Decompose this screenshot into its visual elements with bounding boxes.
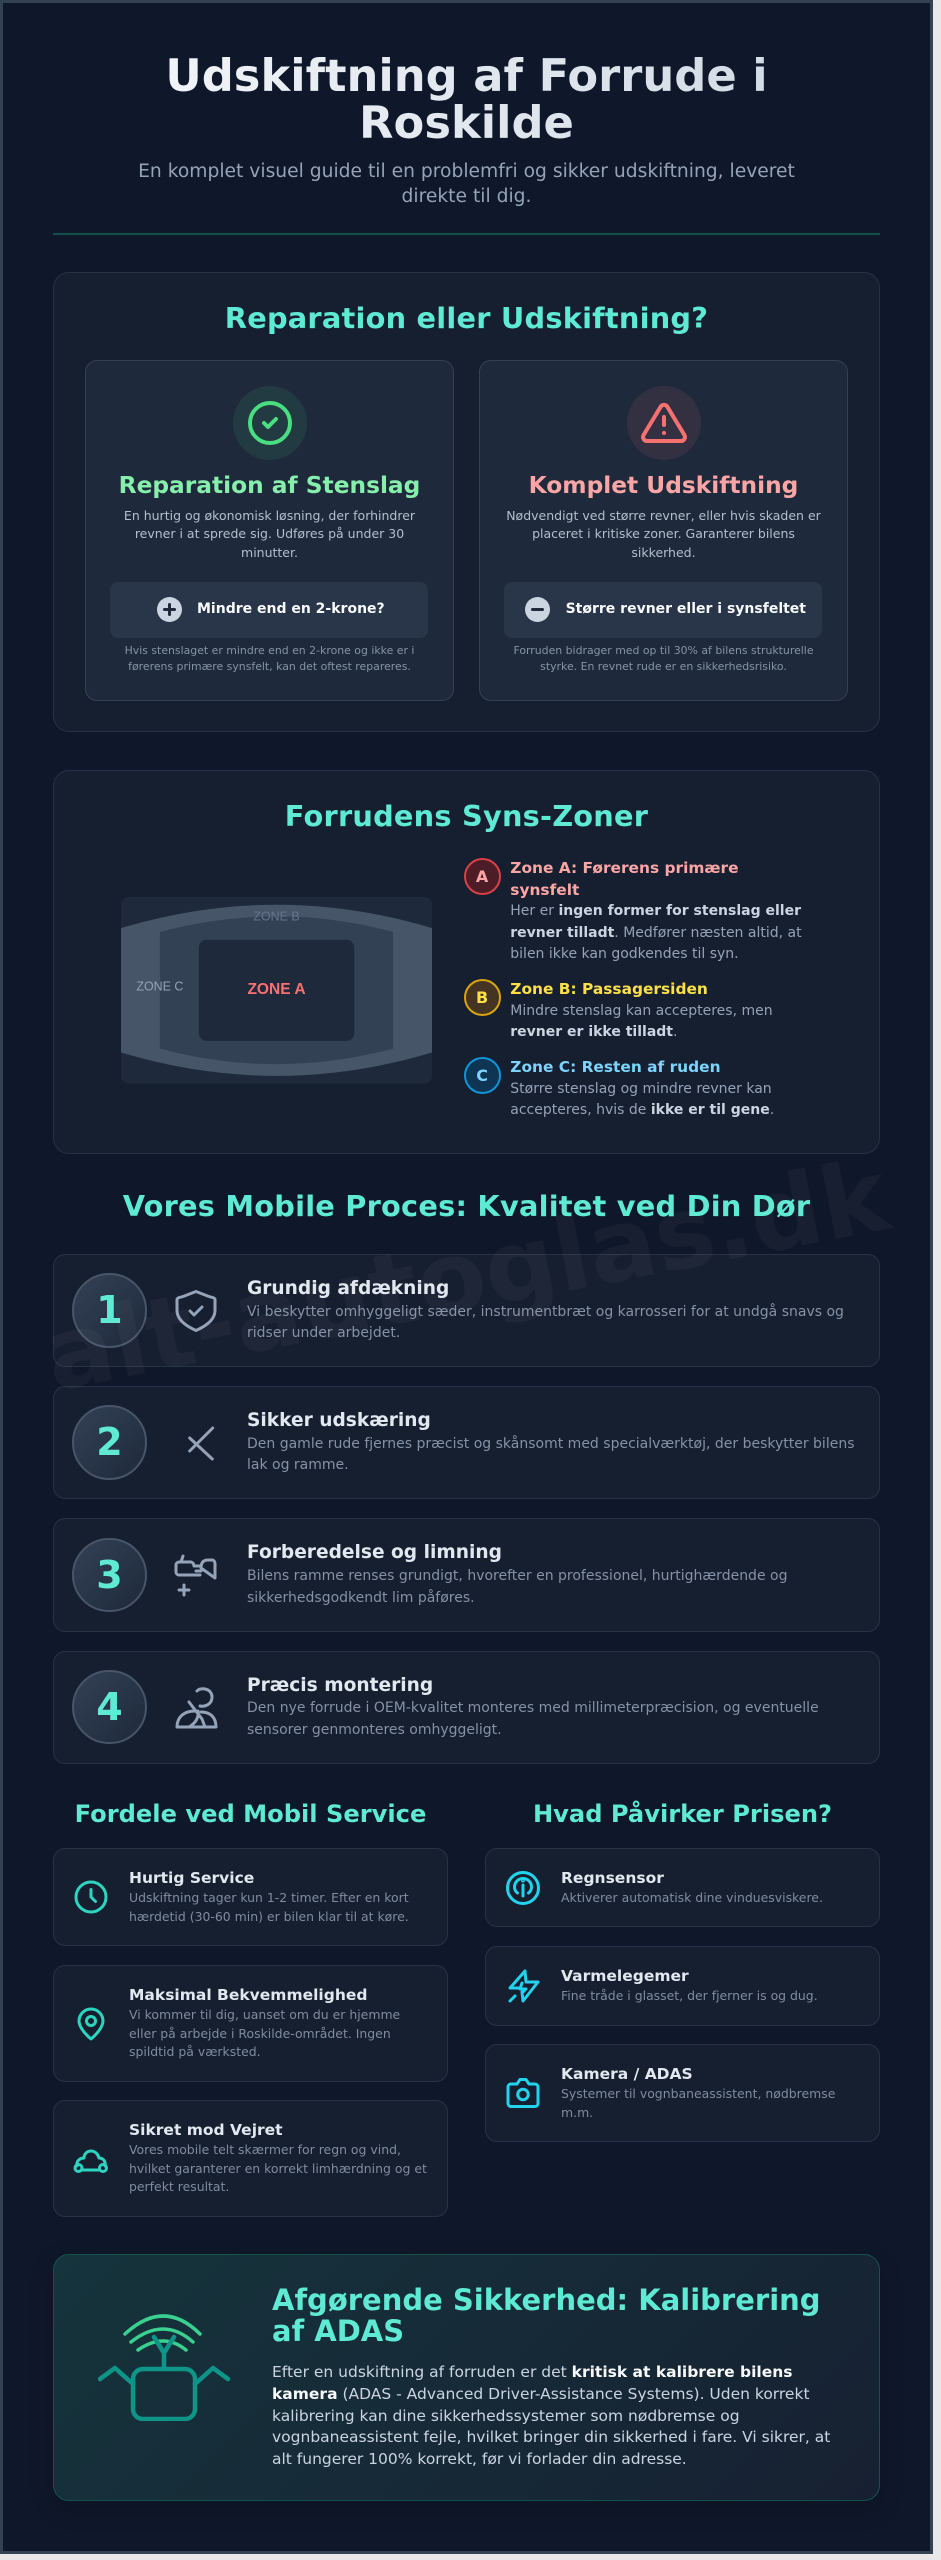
title: Udskiftning af Forrude i: [165, 49, 768, 102]
card text: chip repair: En hurtig og økonomisk løsning, der forhindrer: [124, 508, 415, 523]
step 4 text: Den nye forrude i OEM-kvalitet monteres med millimeterpræcision, og eventuelle: [247, 1700, 819, 1716]
number 4: [72, 1670, 147, 1744]
icon: ADAS camera and signal: [98, 2314, 230, 2421]
step 1 title: Grundig afdækning: [247, 1278, 449, 1299]
benefit text: eller på arbejde i Roskilde-området. Ingen: [129, 2026, 391, 2040]
benefit text: Vores mobile telt skærmer for regn og vind,: [129, 2142, 401, 2157]
heading: zones: Forrudens Syns-Zoner: [285, 799, 648, 833]
card footnote: full replacement: styrke. En revnet rude er en sikkerhedsrisiko.: [540, 660, 787, 673]
panel: windshield zones: [53, 770, 880, 1154]
legend: zones: [464, 858, 802, 1118]
icon: sensor: [506, 1871, 540, 1905]
zone B title: Zone B: Passagersiden: [510, 980, 708, 998]
step 1: [53, 1254, 880, 1367]
card heading: chip repair: Reparation af Stenslag: [119, 472, 420, 499]
heading: price factors: Hvad Påvirker Prisen?: [533, 1800, 832, 1828]
zone A title: Zone A: Førerens primære: [510, 859, 739, 877]
icon: minus: [525, 597, 550, 622]
rule box: larger cracks: [504, 582, 822, 638]
watermark: alt-autoglas.dk: [36, 1136, 897, 1415]
step 2 text: Den gamle rude fjernes præcist og skånsomt med specialværktøj, der beskytter bilens: [247, 1436, 854, 1452]
badge A: [464, 858, 501, 895]
subtitle: direkte til dig.: [402, 186, 531, 207]
factor title: Varmelegemer: [561, 1967, 689, 1985]
callout text: kamera (ADAS - Advanced Driver-Assistance Systems). Uden korrekt: [272, 2385, 810, 2403]
heading: mobile benefits: Fordele ved Mobil Service: [75, 1800, 426, 1828]
factor text: Systemer til vognbaneassistent, nødbremse: [561, 2086, 835, 2101]
title: Roskilde: [359, 96, 574, 149]
subtitle: [138, 161, 795, 207]
icon: lightning bolt: [508, 1969, 540, 2003]
icon: clock: [74, 1880, 108, 1914]
benefit: fast service: [53, 1848, 448, 1946]
step 2 text: lak og ramme.: [247, 1457, 349, 1473]
benefit text: [129, 2007, 400, 2059]
step 3: [53, 1518, 880, 1632]
factor title: Regnsensor: [561, 1869, 664, 1887]
card text: full replacement: sikkerhed.: [631, 545, 696, 560]
callout heading: Afgørende Sikkerhed: Kalibrering: [272, 2282, 821, 2316]
benefit text: perfekt resultat.: [129, 2179, 229, 2194]
icon: check circle: [232, 386, 306, 460]
zone A title: synsfelt: [510, 881, 579, 899]
rule text: Mindre end en 2-krone?: [197, 601, 385, 617]
card text: chip repair: [124, 508, 415, 560]
benefit text: Vi kommer til dig, uanset om du er hjemme: [129, 2007, 400, 2022]
icon: cleaning and glue: [174, 1554, 216, 1596]
badge C: [464, 1057, 501, 1094]
zone A text: bilen ikke kan godkendes til syn.: [510, 946, 739, 962]
callout text: [272, 2363, 830, 2468]
zone B text: [510, 1002, 773, 1040]
factor text: [561, 2086, 835, 2120]
callout text: Efter en udskiftning af forruden er det kritisk at kalibrere bilens: [272, 2363, 793, 2381]
zone B text: Mindre stenslag kan accepteres, men: [510, 1002, 773, 1018]
heading: repair or replace: Reparation eller Udskiftning?: [225, 301, 708, 335]
zone C text: [510, 1080, 774, 1118]
step 2 text: [247, 1435, 854, 1473]
card heading: full replacement: Komplet Udskiftning: [529, 472, 798, 499]
benefit text: [129, 1890, 409, 1924]
badge B: [464, 979, 501, 1016]
factor title: Kamera / ADAS: [561, 2065, 693, 2083]
benefit text: hærdetid (30-60 min) er bilen klar til at køre.: [129, 1908, 409, 1924]
step 1 text: ridser under arbejdet.: [247, 1325, 400, 1341]
factor text: m.m.: [561, 2104, 593, 2120]
step 4: [53, 1651, 880, 1764]
step 3 text: [247, 1568, 787, 1606]
zone B text: revner er ikke tilladt.: [510, 1024, 677, 1040]
benefit text: spildtid på værksted.: [129, 2044, 261, 2059]
zone A text: Her er ingen former for stenslag eller: [510, 903, 801, 919]
card: chip repair: [85, 360, 454, 701]
rule box: smaller than coin: [110, 582, 428, 638]
zone A text: revner tilladt. Medfører næsten altid, at: [510, 925, 802, 941]
callout heading: af ADAS: [272, 2314, 404, 2348]
price factor: rain sensor: [485, 1848, 880, 1927]
panel: repair or replace: [53, 272, 880, 732]
step 4 text: sensorer genmonteres omhyggeligt.: [247, 1722, 502, 1738]
card: full replacement: [479, 360, 848, 701]
step 2 title: Sikker udskæring: [247, 1410, 431, 1431]
card footnote: chip repair: [125, 644, 414, 673]
price factor: heating: [485, 1946, 880, 2026]
benefit: weather protection: [53, 2100, 448, 2217]
icon: location pin: [78, 2008, 104, 2040]
callout: ADAS calibration: [53, 2254, 880, 2501]
card text: chip repair: revner i at sprede sig. Udføres på under 30: [135, 526, 404, 541]
benefit: convenience: [53, 1965, 448, 2082]
benefit title: Hurtig Service: [129, 1869, 254, 1887]
diagram: windshield zones: ZONE A: [247, 981, 306, 998]
zone C text: Større stenslag og mindre revner kan: [510, 1080, 772, 1096]
callout text: alt fungerer 100% korrekt, før vi forlader din adresse.: [272, 2450, 687, 2468]
benefit text: [129, 2142, 427, 2194]
subtitle: En komplet visuel guide til en problemfri og sikker udskiftning, leveret: [138, 161, 795, 182]
card text: full replacement: [506, 508, 821, 560]
step 3 text: Bilens ramme renses grundigt, hvorefter en professionel, hurtighærdende og: [247, 1568, 787, 1584]
rule text: Større revner eller i synsfeltet: [566, 601, 806, 617]
diagram: windshield zones: [121, 897, 432, 1084]
number 2: 2: [96, 1420, 123, 1464]
zone A text: [510, 903, 802, 962]
heading: process: Vores Mobile Proces: Kvalitet ved Din Dør: [123, 1189, 810, 1223]
icon: cutting tool: [188, 1426, 214, 1461]
card text: full replacement: Nødvendigt ved større revner, eller hvis skaden er: [506, 508, 821, 523]
benefit text: Udskiftning tager kun 1-2 timer. Efter en kort: [129, 1890, 409, 1905]
step 4 title: Præcis montering: [247, 1675, 433, 1696]
number 2: [72, 1405, 147, 1480]
card footnote: full replacement: [513, 644, 814, 673]
benefit text: hvilket garanterer en korrekt limhærdning og et: [129, 2160, 427, 2176]
step 3 title: Forberedelse og limning: [247, 1542, 502, 1563]
card text: chip repair: minutter.: [241, 545, 298, 560]
step 4 text: [247, 1700, 819, 1738]
factor text: Fine tråde i glasset, der fjerner is og dug.: [561, 1988, 818, 2003]
diagram: windshield zones: ZONE B: [253, 909, 300, 923]
card text: full replacement: placeret i kritiske zoner. Garanterer bilens: [532, 526, 795, 541]
callout heading: [272, 2282, 821, 2348]
benefit title: Sikret mod Vejret: [129, 2121, 283, 2139]
number 1: 1: [96, 1288, 123, 1332]
icon: warning triangle: [626, 386, 700, 460]
card footnote: full replacement: Forruden bidrager med op til 30% af bilens strukturelle: [513, 644, 814, 657]
step 1 text: Vi beskytter omhyggeligt sæder, instrumentbræt og karrosseri for at undgå snavs og: [247, 1304, 844, 1320]
badge B: B: [476, 988, 488, 1007]
icon: camera: [506, 2078, 540, 2108]
number 3: [72, 1538, 147, 1612]
step 2: [53, 1386, 880, 1499]
badge A: A: [476, 867, 488, 886]
price factor: camera ADAS: [485, 2044, 880, 2142]
zone A title: [510, 859, 739, 899]
callout text: vognbaneassistent fejle, hvilket bringer din sikkerhed i fare. Vi sikrer, at: [272, 2428, 830, 2446]
card footnote: chip repair: førerens primære synsfelt, kan det oftest repareres.: [128, 660, 411, 673]
icon: plus: [157, 597, 182, 622]
factor text: Aktiverer automatisk dine vinduesviskere.: [561, 1890, 823, 1905]
icon: tent on wheels: [74, 2150, 108, 2173]
benefit title: Maksimal Bekvemmelighed: [129, 1986, 367, 2004]
icon: mounting: [176, 1687, 218, 1729]
number 1: [72, 1273, 147, 1348]
zone C text: accepteres, hvis de ikke er til gene.: [510, 1102, 774, 1118]
step 1 text: [247, 1303, 844, 1341]
number 3: 3: [96, 1553, 123, 1597]
step 3 text: sikkerhedsgodkendt lim påføres.: [247, 1590, 475, 1606]
card footnote: chip repair: Hvis stenslaget er mindre end en 2-krone og ikke er i: [125, 644, 414, 657]
callout text: kalibrering kan dine sikkerhedssystemer som nødbremse og: [272, 2407, 740, 2425]
badge C: C: [476, 1066, 488, 1085]
diagram: windshield zones: ZONE C: [136, 979, 183, 993]
number 4: 4: [96, 1685, 123, 1729]
title: [0, 53, 933, 146]
icon: shield: [176, 1290, 216, 1332]
zone C title: Zone C: Resten af ruden: [510, 1058, 721, 1076]
